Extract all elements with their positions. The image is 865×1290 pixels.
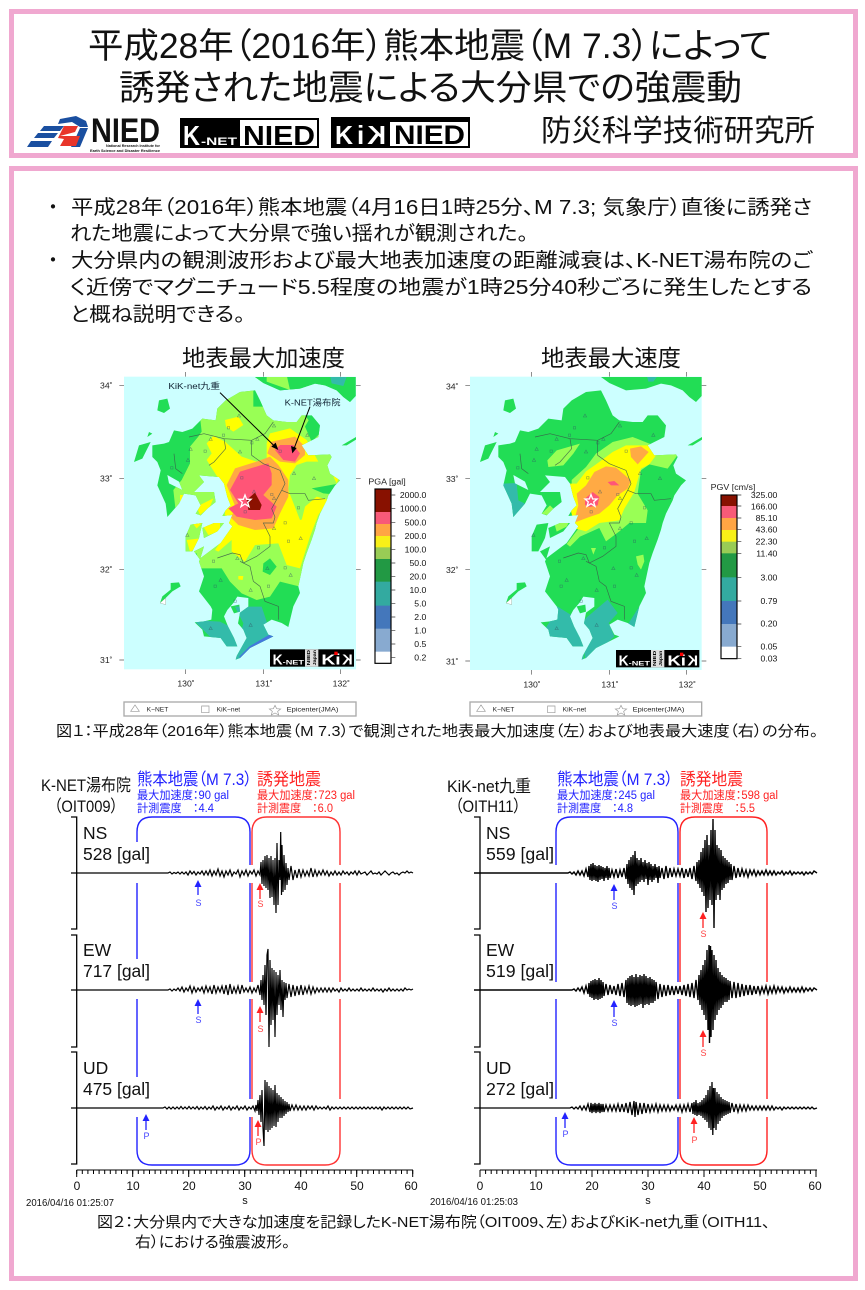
legend: PGV map: KiK−net bbox=[563, 707, 586, 714]
logo: K-NET KiK badge bbox=[270, 649, 354, 669]
logo: KiK NIED: NIED bbox=[394, 120, 465, 150]
map axis ticks and labels: 34˚ bbox=[446, 381, 459, 391]
logo: K-NET NIED: -NET bbox=[201, 136, 237, 148]
organization name: 防災科学技術研究所 bbox=[541, 115, 815, 148]
logo: K-NET KiK badge: -NET bbox=[283, 660, 304, 667]
time axis: s bbox=[645, 1195, 651, 1207]
color scale: PGV: 0.79 bbox=[760, 596, 778, 606]
logo: K-NET NIED: K bbox=[183, 120, 200, 151]
trace labels: NS bbox=[83, 823, 107, 843]
arrows: phase picks: S bbox=[612, 901, 618, 911]
color scale: PGV: 0.03 bbox=[760, 654, 778, 664]
arrows: phase picks: S bbox=[196, 1015, 202, 1025]
arrows: phase picks: P bbox=[562, 1129, 569, 1139]
arrows: phase picks: S bbox=[700, 1048, 707, 1058]
caption: figure 1: 図１：平成28年（2016年）熊本地震（M 7.3）で観測された地表最大加速度（左）および地表最大速度（右）の分布。 bbox=[56, 723, 818, 740]
caption: figure 2: 図２：大分県内で大きな加速度を記録したK-NET湯布院（OIT009、左）およびKiK-net九重（OITH11、 bbox=[97, 1214, 770, 1231]
annotation: main shock: 最大加速度：245 gal bbox=[557, 788, 655, 802]
trace labels: EW bbox=[83, 940, 112, 960]
waveform: UD bbox=[474, 1082, 817, 1135]
map axis ticks and labels: 131˚ bbox=[601, 679, 619, 689]
time axis: 40 bbox=[294, 1179, 308, 1193]
trace labels bbox=[83, 823, 150, 1099]
trace labels: UD bbox=[83, 1058, 108, 1078]
text block: summary bullets: ・ bbox=[48, 197, 58, 219]
trace labels: EW bbox=[486, 940, 515, 960]
logo: KiK NIED bbox=[331, 117, 470, 150]
annotation: triggered earthquake: 計測震度 ：5.5 bbox=[680, 801, 755, 815]
waveform: NS bbox=[71, 832, 413, 913]
time axis bbox=[26, 1170, 418, 1209]
time axis: 50 bbox=[350, 1179, 364, 1193]
color scale: PGV: 43.60 bbox=[756, 524, 778, 534]
waveform: NS bbox=[474, 819, 817, 928]
map axis ticks and labels: 132˚ bbox=[333, 679, 350, 689]
icon: epicenter star bbox=[585, 495, 597, 506]
color scale: PGA: 10.0 bbox=[409, 585, 427, 595]
map axis ticks and labels bbox=[446, 372, 706, 689]
text block: summary bullets: 平成28年（2016年）熊本地震（4月16日1時25分、M 7.3; 気象庁）直後に誘発さ bbox=[71, 196, 812, 219]
map axis ticks and labels: 132˚ bbox=[679, 679, 696, 689]
time axis: 10 bbox=[529, 1179, 543, 1193]
legend: PGA map: Epicenter(JMA) bbox=[287, 707, 338, 714]
logo: NIED: Earth Science and Disaster Resilience bbox=[90, 148, 161, 153]
logo: K-NET KiK badge: Japan bbox=[312, 650, 317, 665]
annotation: main shock: 計測震度 ：4.8 bbox=[557, 801, 633, 815]
arrows: phase picks bbox=[562, 884, 707, 1145]
station label: （OITH11） bbox=[455, 797, 521, 816]
arrows: phase picks: S bbox=[700, 929, 707, 939]
arrows: phase picks: S bbox=[258, 899, 264, 909]
logo: K-NET NIED bbox=[180, 118, 319, 151]
trace labels: 559 [gal] bbox=[486, 844, 554, 864]
color scale: PGV: 0.20 bbox=[760, 618, 778, 628]
color scale: PGA: 1.0 bbox=[414, 626, 427, 636]
color scale: PGV: 325.00 bbox=[751, 490, 778, 500]
time axis: 20 bbox=[182, 1179, 196, 1193]
text block: summary bullets: く近傍でマグニチュード5.5程度の地震が1時25分40秒ごろに発生したとする bbox=[70, 276, 812, 299]
map axis ticks and labels: 32˚ bbox=[100, 564, 113, 574]
color scale: PGA: 0.2 bbox=[414, 653, 427, 663]
map axis ticks and labels: 33˚ bbox=[100, 473, 113, 483]
color scale: PGA: PGA [gal] bbox=[368, 477, 406, 486]
color scale: PGA: 2.0 bbox=[414, 612, 427, 622]
map axis ticks and labels: 33˚ bbox=[446, 474, 459, 484]
callout: K-NET Yufuin bbox=[285, 397, 341, 453]
station label: KiK-net九重 bbox=[447, 777, 531, 796]
trace labels: 528 [gal] bbox=[83, 844, 150, 864]
map axis ticks and labels: 131˚ bbox=[255, 679, 273, 689]
callout: K-NET Yufuin: K-NET湯布院 bbox=[285, 397, 341, 407]
logo: K-NET KiK badge: NIED bbox=[306, 649, 311, 665]
arrows: phase picks bbox=[142, 880, 264, 1147]
time axis: 60 bbox=[404, 1179, 418, 1193]
legend: PGV map: Epicenter(JMA) bbox=[633, 707, 684, 714]
map axis ticks and labels: 34˚ bbox=[100, 381, 113, 391]
color scale: PGV: 166.00 bbox=[751, 502, 778, 512]
axis frames bbox=[71, 817, 77, 1164]
trace labels: UD bbox=[486, 1058, 511, 1078]
color scale: PGA: 1000.0 bbox=[400, 504, 427, 514]
legend: PGA map: K−NET bbox=[147, 707, 168, 714]
map axis ticks and labels: 31˚ bbox=[100, 655, 113, 665]
logo: K-NET KiK badge: Ki bbox=[321, 653, 341, 669]
waveform: EW bbox=[71, 949, 413, 1047]
title: 誘発された地震による大分県での強震動 bbox=[119, 69, 742, 108]
annotation: main shock bbox=[557, 770, 673, 815]
annotation: triggered earthquake: 最大加速度：598 gal bbox=[680, 788, 778, 802]
bracket: main shock window bbox=[556, 817, 678, 1165]
logo: K-NET KiK badge: NIED bbox=[652, 650, 657, 666]
trace labels: 519 [gal] bbox=[486, 961, 554, 981]
time axis: 10 bbox=[126, 1179, 140, 1193]
logo: K-NET KiK badge: K bbox=[687, 653, 698, 669]
time axis: 50 bbox=[753, 1179, 767, 1193]
logo: K-NET NIED: NIED bbox=[243, 120, 315, 151]
logo: K-NET KiK badge: Japan bbox=[658, 650, 663, 666]
annotation: main shock: 最大加速度：90 gal bbox=[137, 788, 229, 802]
heading: PGV map: 地表最大速度 bbox=[541, 345, 681, 371]
color scale: PGA: 20.0 bbox=[409, 571, 427, 581]
annotation: triggered earthquake: 誘発地震 bbox=[257, 770, 321, 789]
arrows: phase picks: P bbox=[256, 1137, 262, 1147]
trace labels: 272 [gal] bbox=[486, 1079, 554, 1099]
color scale: PGV: 0.05 bbox=[760, 642, 778, 652]
station label: K-NET湯布院 bbox=[41, 776, 131, 795]
bracket: triggered window bbox=[680, 817, 767, 1165]
time axis: 2016/04/16 01:25:07 bbox=[26, 1198, 114, 1209]
time axis: 0 bbox=[477, 1179, 484, 1193]
trace labels bbox=[486, 823, 554, 1099]
annotation: triggered earthquake bbox=[257, 770, 355, 815]
time axis: 30 bbox=[641, 1179, 655, 1193]
text block: summary bullets: 大分県内の観測波形および最大地表加速度の距離減衰は、K-NET湯布院のご bbox=[71, 249, 813, 272]
trace labels: 475 [gal] bbox=[83, 1079, 150, 1099]
annotation: triggered earthquake: 計測震度 ：6.0 bbox=[257, 801, 333, 815]
legend: PGA map bbox=[124, 702, 356, 716]
time axis: 30 bbox=[238, 1179, 252, 1193]
text block: summary bullets: れた地震によって大分県で強い揺れが観測された。 bbox=[70, 222, 528, 245]
map: peak ground velocity bbox=[446, 372, 778, 716]
text block: summary bullets: ・ bbox=[48, 250, 58, 272]
time axis bbox=[430, 1170, 822, 1208]
logo: K-NET KiK badge: Ki bbox=[667, 653, 686, 669]
title bbox=[88, 27, 772, 108]
callout: KiK-net Kuju bbox=[168, 381, 278, 450]
time axis: 40 bbox=[697, 1179, 711, 1193]
logo: NIED bbox=[27, 112, 161, 153]
logo: NIED: National Research Institute for bbox=[106, 143, 160, 148]
color scale: PGA: 50.0 bbox=[409, 558, 427, 568]
color scale: PGA: 0.5 bbox=[414, 639, 427, 649]
time axis: 60 bbox=[808, 1179, 822, 1193]
time axis: 20 bbox=[585, 1179, 599, 1193]
color scale: PGA bbox=[368, 477, 427, 663]
logo: K-NET KiK badge: K bbox=[342, 653, 353, 669]
time axis: s bbox=[242, 1195, 248, 1207]
color scale: PGV: 3.00 bbox=[760, 573, 778, 583]
annotation: triggered earthquake bbox=[680, 770, 778, 815]
panel: header bbox=[12, 12, 856, 156]
annotation: triggered earthquake: 最大加速度：723 gal bbox=[257, 788, 355, 802]
color scale: PGA: 5.0 bbox=[414, 598, 427, 608]
annotation: main shock: 熊本地震（M 7.3） bbox=[557, 770, 673, 789]
chart: K-NET Yufuin waveforms bbox=[26, 770, 418, 1209]
logo: K-NET KiK badge bbox=[616, 650, 699, 669]
bracket: main shock window bbox=[137, 817, 250, 1165]
logo: K-NET KiK badge: -NET bbox=[629, 660, 650, 667]
map axis ticks and labels: 130˚ bbox=[523, 679, 541, 689]
logo: K-NET KiK badge: K bbox=[619, 653, 629, 669]
arrows: phase picks: P bbox=[692, 1135, 698, 1145]
arrows: phase picks: S bbox=[612, 1018, 618, 1028]
station label: （OIT009） bbox=[54, 797, 118, 816]
time axis: 2016/04/16 01:25:03 bbox=[430, 1197, 518, 1208]
bracket: triggered window bbox=[252, 817, 340, 1165]
map axis ticks and labels: 31˚ bbox=[446, 657, 459, 667]
map: peak ground acceleration bbox=[100, 372, 427, 716]
legend: PGA map: KiK−net bbox=[217, 707, 240, 714]
trace labels: NS bbox=[486, 823, 510, 843]
heading: PGA map: 地表最大加速度 bbox=[182, 345, 345, 371]
axis frames bbox=[474, 817, 480, 1164]
logo: K-NET KiK badge: K bbox=[273, 653, 283, 669]
legend: PGV map bbox=[470, 702, 702, 716]
caption: figure 2: 右）における強震波形。 bbox=[135, 1234, 290, 1251]
color scale: PGV: 85.10 bbox=[756, 513, 778, 523]
color scale: PGV bbox=[711, 483, 778, 664]
map axis ticks and labels: 32˚ bbox=[446, 565, 459, 575]
station label bbox=[447, 777, 531, 816]
legend: PGV map: K−NET bbox=[493, 707, 514, 714]
caption: figure 2 bbox=[97, 1214, 770, 1251]
arrows: phase picks: S bbox=[258, 1024, 264, 1034]
map axis ticks and labels bbox=[100, 372, 361, 689]
annotation: main shock bbox=[137, 770, 252, 815]
color scale: PGA: 500.0 bbox=[405, 517, 427, 527]
logo: NIED: NIED bbox=[91, 112, 160, 150]
color scale: PGV: PGV [cm/s] bbox=[711, 483, 755, 492]
logo: KiK NIED: K bbox=[335, 120, 353, 150]
logo: KiK NIED: K bbox=[367, 120, 386, 150]
waveform: UD bbox=[71, 1080, 413, 1146]
color scale: PGA: 200.0 bbox=[405, 531, 427, 541]
callout: KiK-net Kuju: KiK-net九重 bbox=[168, 381, 220, 391]
color scale: PGV: 22.30 bbox=[756, 536, 778, 546]
color scale: PGA: 2000.0 bbox=[400, 490, 427, 500]
icon: epicenter star bbox=[239, 495, 251, 507]
arrows: phase picks: P bbox=[144, 1131, 150, 1141]
chart: KiK-net Kuju waveforms bbox=[430, 770, 822, 1208]
station label bbox=[41, 776, 131, 816]
annotation: main shock: 熊本地震（M 7.3） bbox=[137, 770, 252, 789]
map axis ticks and labels: 130˚ bbox=[177, 679, 195, 689]
color scale: PGA: 100.0 bbox=[405, 544, 427, 554]
text block: summary bullets bbox=[48, 196, 813, 326]
trace labels: 717 [gal] bbox=[83, 961, 150, 981]
logo: KiK NIED: i bbox=[357, 120, 364, 150]
time axis: 0 bbox=[74, 1179, 81, 1193]
text block: summary bullets: と概ね説明できる。 bbox=[70, 303, 245, 326]
annotation: main shock: 計測震度 ：4.4 bbox=[137, 801, 215, 815]
color scale: PGV: 11.40 bbox=[756, 548, 778, 558]
arrows: phase picks: S bbox=[196, 898, 202, 908]
annotation: triggered earthquake: 誘発地震 bbox=[680, 770, 743, 789]
waveform: EW bbox=[474, 945, 817, 1043]
title: 平成28年（2016年）熊本地震（M 7.3）によって bbox=[88, 27, 772, 66]
